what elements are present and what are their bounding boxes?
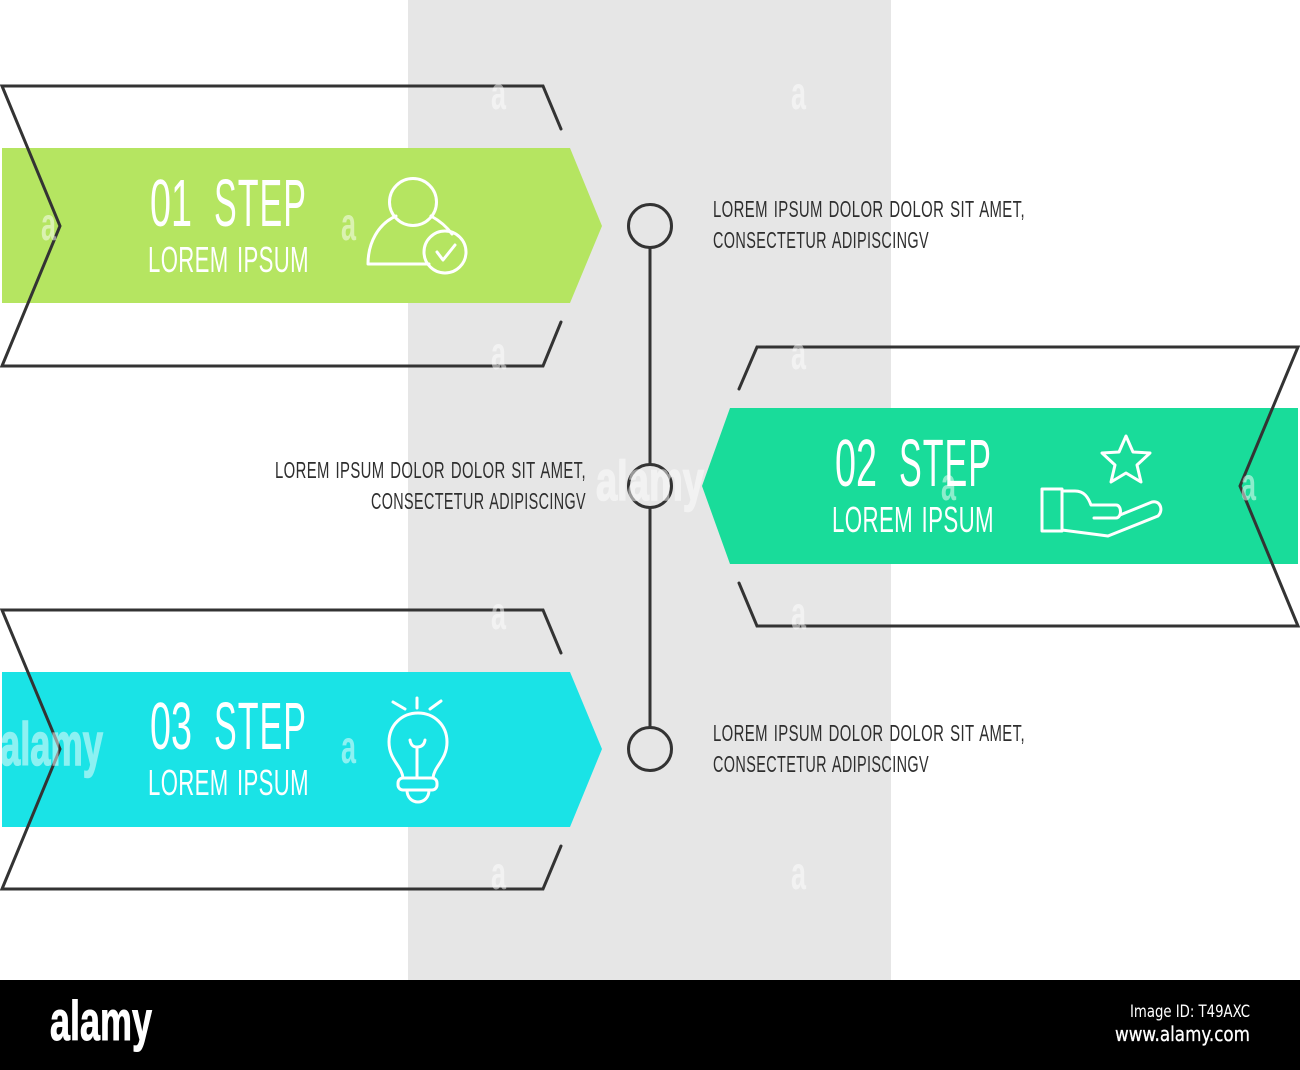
step 3 heading: 03	[150, 689, 192, 764]
step 2 outline bracket	[739, 347, 1298, 626]
watermarks: a	[791, 847, 806, 899]
step 1 subheading: LOREM IPSUM	[148, 239, 309, 280]
step 2 heading	[835, 426, 992, 501]
step 2 heading: STEP	[899, 426, 992, 501]
footer bar	[0, 980, 1300, 1070]
text block: step 1 description: CONSECTETUR ADIPISCINGV	[713, 227, 929, 253]
watermarks	[0, 67, 1256, 899]
text block: step 3 description: CONSECTETUR ADIPISCINGV	[713, 751, 929, 777]
watermarks: alamy	[596, 449, 704, 512]
text block: step 3 description	[713, 720, 1025, 777]
watermarks: a	[491, 587, 506, 639]
watermarks: a	[791, 67, 806, 119]
step 3 cyan arrow banner	[2, 672, 602, 827]
watermarks: a	[491, 847, 506, 899]
icon: light bulb	[389, 698, 447, 802]
watermarks: a	[341, 198, 356, 250]
panel: step 2	[702, 347, 1298, 626]
text block: step 2 description	[275, 457, 586, 514]
watermarks: a	[491, 327, 506, 379]
watermarks: alamy	[0, 711, 103, 778]
watermarks: a	[1241, 458, 1256, 510]
grey background band	[408, 0, 891, 980]
timeline with three nodes	[628, 204, 672, 770]
text block: step 1 description: LOREM IPSUM DOLOR DOLOR SIT AMET,	[713, 196, 1025, 222]
text block: step 3 description: LOREM IPSUM DOLOR DOLOR SIT AMET,	[713, 720, 1025, 746]
step 3 heading: STEP	[214, 689, 307, 764]
watermarks: a	[791, 327, 806, 379]
step 1 heading: 01	[150, 166, 192, 241]
step 3 outline bracket	[2, 610, 561, 889]
footer logo: alamy	[50, 989, 152, 1052]
panel: step 1	[2, 86, 602, 366]
step 3 heading	[150, 689, 307, 764]
text block: step 2 description: CONSECTETUR ADIPISCINGV	[371, 488, 586, 514]
icon: user with check mark	[368, 178, 466, 273]
step 2 subheading: LOREM IPSUM	[832, 499, 994, 540]
icon: hand holding star	[1042, 436, 1161, 536]
panel: step 3	[2, 610, 602, 889]
watermarks: a	[41, 198, 56, 250]
step 2 heading: 02	[835, 426, 877, 501]
footer image id: Image ID: T49AXC	[1130, 1002, 1250, 1022]
step 1 green arrow banner	[2, 148, 602, 303]
watermarks: a	[941, 458, 956, 510]
step 1 heading	[150, 166, 307, 241]
text block: step 2 description: LOREM IPSUM DOLOR DOLOR SIT AMET,	[275, 457, 586, 483]
watermarks: a	[491, 67, 506, 119]
watermarks: a	[341, 721, 356, 773]
text block: step 1 description	[713, 196, 1025, 253]
step 1 outline bracket	[2, 86, 561, 366]
step 3 subheading: LOREM IPSUM	[148, 762, 309, 803]
footer website: www.alamy.com	[1115, 1022, 1250, 1046]
step 2 teal arrow banner	[702, 408, 1298, 564]
watermarks: a	[791, 587, 806, 639]
step 1 heading: STEP	[214, 166, 307, 241]
